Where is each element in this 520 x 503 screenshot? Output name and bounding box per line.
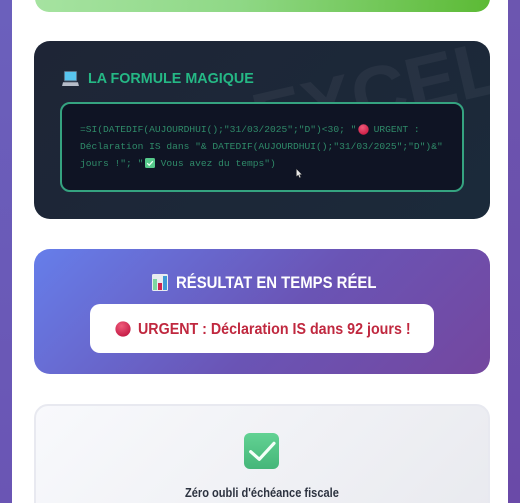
icon: mouse cursor	[296, 168, 302, 178]
code line 3: jours !"; " Vous avez du temps")	[80, 158, 276, 169]
icon: bar chart	[152, 274, 168, 291]
code line 2: Déclaration IS dans "& DATEDIF(AUJOURDHUI();"31/03/2025";"D")&"	[80, 141, 443, 152]
icon: laptop	[62, 71, 79, 86]
icon: red circle	[358, 124, 369, 135]
result box	[90, 304, 434, 353]
benefit text: Zéro oubli d'échéance fiscale	[185, 486, 339, 500]
code box	[60, 102, 464, 192]
heading: LA FORMULE MAGIQUE	[88, 70, 254, 87]
right purple page edge	[508, 0, 520, 503]
green banner bottom	[35, 0, 490, 12]
icon: small check	[145, 158, 155, 168]
code line 1: =SI(DATEDIF(AUJOURDHUI();"31/03/2025";"D")<30; " URGENT :	[80, 124, 420, 135]
icon: check mark	[244, 433, 279, 469]
panel: résultat en temps réel	[34, 249, 490, 374]
result text: URGENT : Déclaration IS dans 92 jours !	[138, 320, 411, 338]
panel: avantage	[34, 404, 490, 503]
icon: red circle	[115, 321, 131, 337]
heading: RÉSULTAT EN TEMPS RÉEL	[176, 273, 376, 292]
panel: la formule magique	[34, 41, 490, 219]
left purple page edge	[0, 0, 12, 503]
